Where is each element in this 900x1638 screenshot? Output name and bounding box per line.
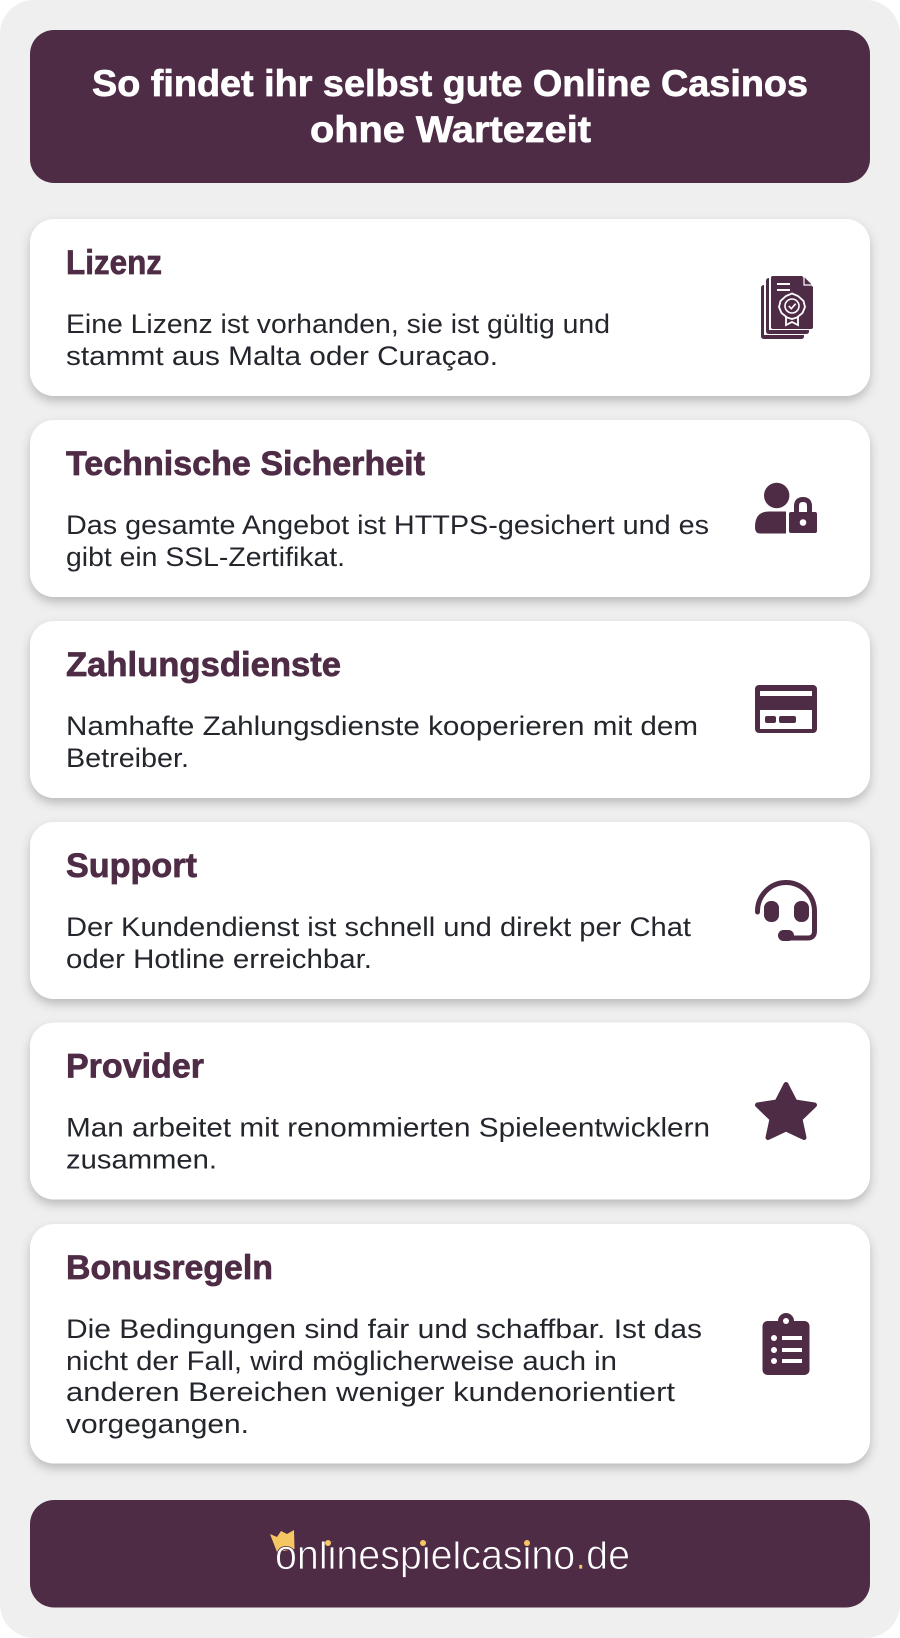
text: Support: Der Kundendienst ist schnell und direkt per Chat	[66, 912, 692, 942]
text: Lizenz: Eine Lizenz ist vorhanden, sie ist gültig und	[66, 309, 610, 339]
icon: certificate	[761, 276, 813, 339]
icon: crown	[270, 1530, 294, 1552]
heading: Support: Support	[66, 847, 197, 885]
text: Technische Sicherheit: Das gesamte Angebot ist HTTPS-gesichert und es	[66, 510, 709, 540]
text: Bonusregeln: nicht der Fall, wird möglicherweise auch in	[66, 1346, 617, 1376]
text: Provider: zusammen.	[66, 1144, 217, 1174]
text: Provider: Man arbeitet mit renommierten Spieleentwicklern	[66, 1112, 710, 1142]
footer banner	[30, 1500, 870, 1608]
text: Zahlungsdienste	[66, 711, 698, 773]
heading: Bonusregeln: Bonusregeln	[66, 1249, 273, 1287]
text: Bonusregeln: Die Bedingungen sind fair und schaffbar. Ist das	[66, 1314, 702, 1344]
logo text: onlinespielcasino.de	[275, 1531, 630, 1578]
heading: Technische Sicherheit: Technische Sicherheit	[66, 445, 425, 483]
title	[92, 63, 808, 150]
title: So findet ihr selbst gute Online Casinos	[92, 63, 808, 104]
text: Technische Sicherheit	[66, 510, 709, 572]
heading: Lizenz: Lizenz	[66, 244, 162, 282]
title: ohne Wartezeit	[310, 109, 591, 150]
logo: onlinespielcasino.de	[270, 1530, 630, 1578]
icon: user with lock	[755, 483, 817, 534]
icon: headset	[757, 883, 814, 941]
text: Zahlungsdienste: Betreiber.	[66, 743, 189, 773]
text: Bonusregeln: anderen Bereichen weniger kundenorientiert	[66, 1377, 676, 1407]
text: Lizenz	[66, 309, 610, 371]
text: Support: oder Hotline erreichbar.	[66, 944, 372, 974]
logo gold dots	[325, 1540, 530, 1546]
panel: Lizenz	[30, 219, 870, 396]
icon: credit card	[755, 685, 817, 733]
text: Bonusregeln: vorgegangen.	[66, 1409, 249, 1439]
text: Bonusregeln	[66, 1314, 702, 1439]
text: Lizenz: stammt aus Malta oder Curaçao.	[66, 341, 498, 371]
icon: star	[758, 1084, 814, 1138]
text: Technische Sicherheit: gibt ein SSL-Zertifikat.	[66, 542, 345, 572]
panel: Technische Sicherheit	[30, 420, 870, 597]
title banner	[30, 30, 870, 183]
text: Provider	[66, 1112, 710, 1174]
panel: Provider	[30, 1022, 870, 1200]
panel: Bonusregeln	[30, 1224, 870, 1464]
text: Support	[66, 912, 692, 974]
heading: Provider: Provider	[66, 1048, 204, 1086]
panel: Support	[30, 822, 870, 999]
icon: clipboard	[762, 1313, 810, 1375]
heading: Zahlungsdienste: Zahlungsdienste	[66, 646, 341, 684]
panel: Zahlungsdienste	[30, 621, 870, 798]
text: Zahlungsdienste: Namhafte Zahlungsdienste kooperieren mit dem	[66, 711, 698, 741]
